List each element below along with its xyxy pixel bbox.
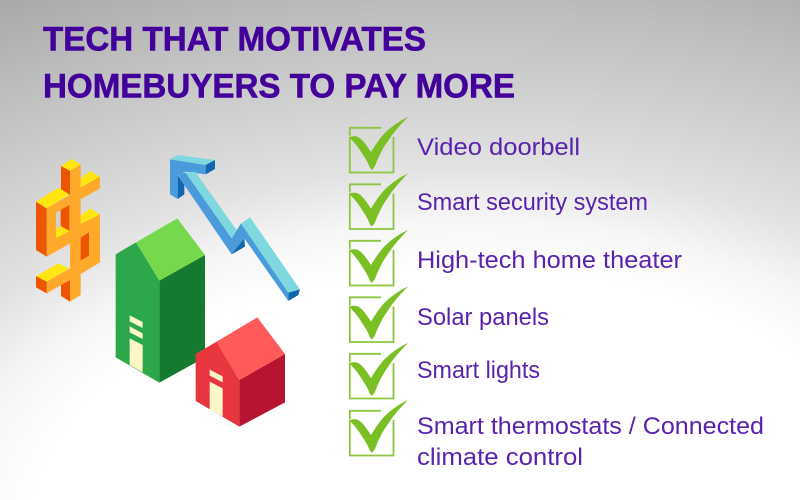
title: TECH THAT MOTIVATES (43, 20, 426, 58)
item: smart security system (349, 174, 648, 229)
icon: rising arrow (170, 155, 300, 301)
item: solar panels (349, 286, 549, 342)
item: high-tech home theater (349, 230, 682, 286)
icon: red house (196, 317, 285, 427)
item: video doorbell (349, 117, 580, 172)
item: smart security system: Smart security system (417, 189, 648, 216)
icon: green house (116, 218, 205, 383)
item: smart thermostats (349, 400, 764, 471)
item: high-tech home theater: High-tech home theater (417, 247, 682, 274)
title: HOMEBUYERS TO PAY MORE (43, 68, 515, 106)
item: solar panels: Solar panels (417, 304, 549, 331)
item: video doorbell: Video doorbell (417, 134, 580, 161)
item: smart lights: Smart lights (417, 357, 540, 384)
icon: dollar sign (36, 159, 100, 302)
checklist (349, 117, 764, 471)
item: smart lights (349, 343, 540, 398)
item: smart thermostats: climate control (417, 444, 583, 471)
title (43, 20, 515, 106)
item: smart thermostats: Smart thermostats / Connected (417, 413, 764, 440)
